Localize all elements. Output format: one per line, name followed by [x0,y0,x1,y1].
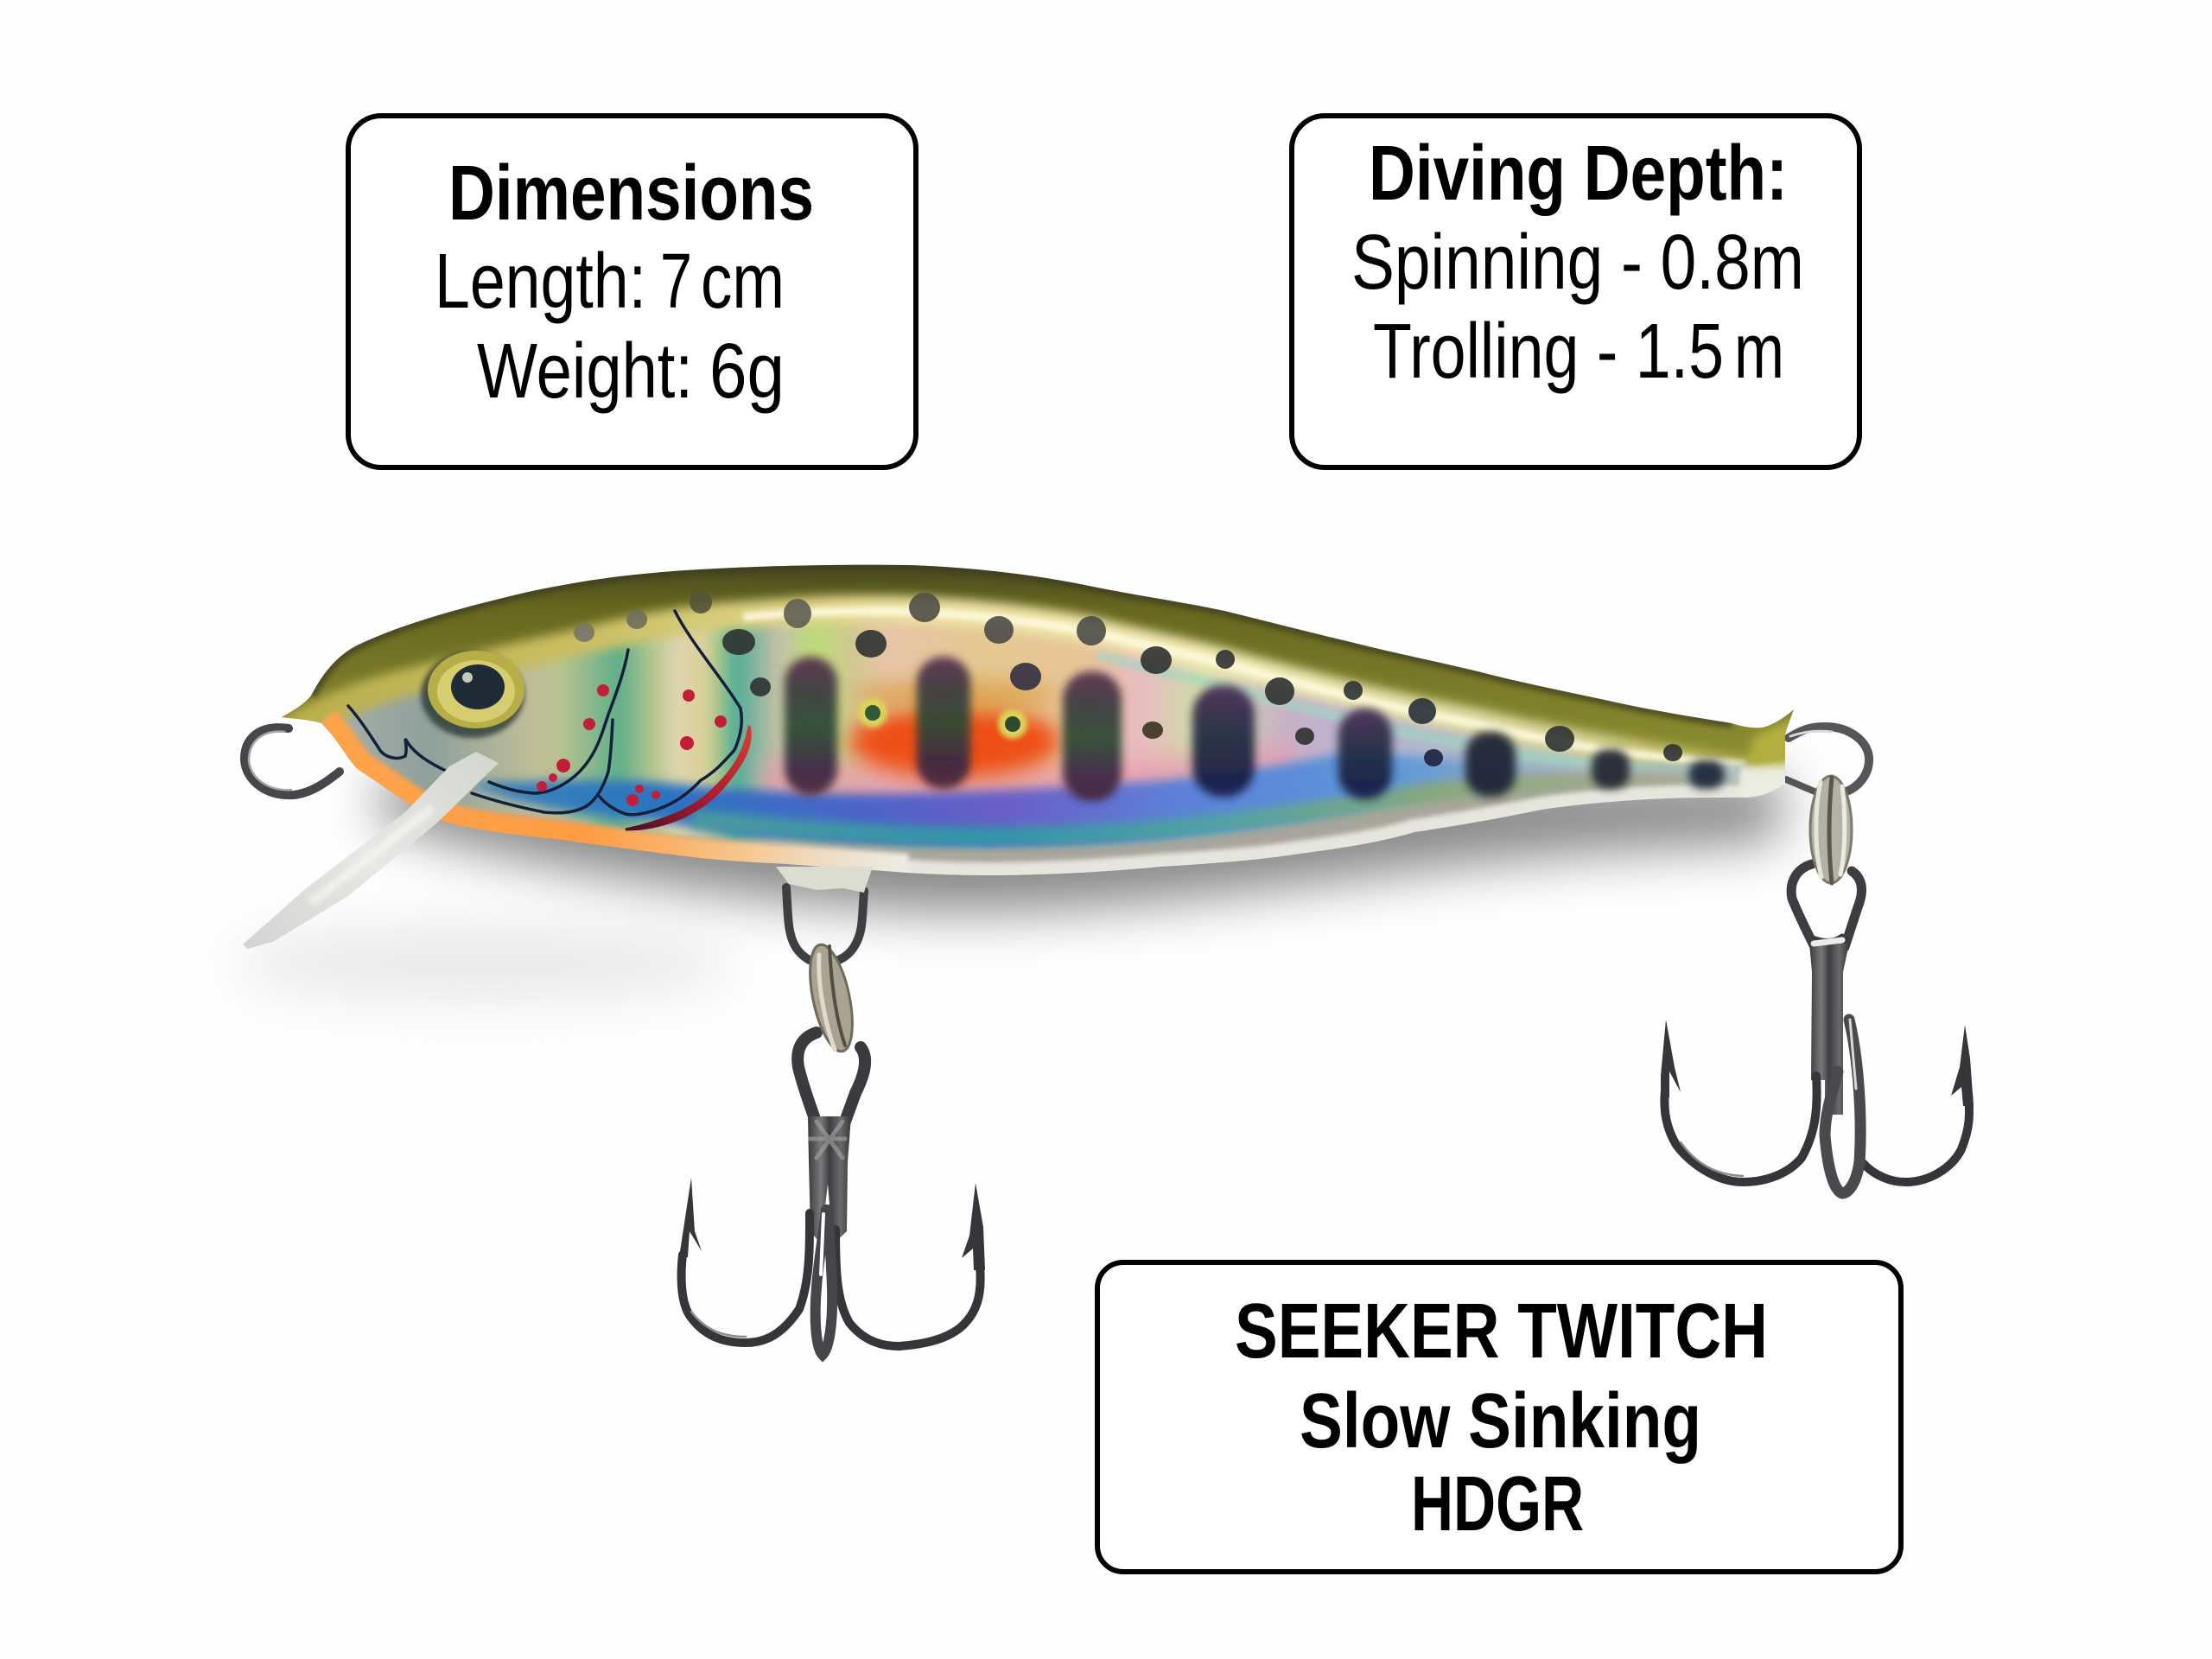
split ring [1810,776,1852,883]
yellow ringed spots [858,698,1027,739]
illustration: fishing lure [233,553,1974,1355]
panel: product name [1097,1262,1901,1572]
tail cap [1737,757,1785,798]
treble shank [1809,944,1849,1115]
treble shank [808,1116,851,1244]
silver belly [540,781,1738,875]
text: length: 7 [660,238,692,325]
left point [1664,1076,1817,1182]
red gill crescent [626,726,750,830]
orange belly [321,723,907,873]
heading: Diving Depth: Diving Depth: [1369,130,1788,217]
eye [421,651,524,738]
diving lip [243,752,499,949]
body spots [574,591,1682,766]
nose line tie ring [245,728,340,795]
red dots [537,684,727,806]
belly hanger [786,887,817,963]
panel: diving depth [1292,116,1859,467]
heading: Dimensions: Dimensions [448,150,814,237]
tail hook assembly [1664,727,1969,1193]
shadow under lure [233,778,1780,1002]
blue band [467,752,1754,849]
left point [682,1213,810,1343]
parr bars [785,657,1725,801]
front point [1825,1020,1860,1193]
pink lower flank [747,741,1300,798]
text: length: Length: [435,238,646,325]
text: weight: 6g [709,328,785,415]
back edge [311,565,1732,723]
panel: dimensions [348,116,916,467]
right point [836,1230,981,1346]
text: trolling depth: m [1734,308,1784,395]
text: length: cm [701,238,785,325]
text: spinning depth: Spinning - 0.8m [1351,219,1804,306]
gill lines [348,611,741,815]
teal band [691,782,1685,836]
heading: model name: SEEKER TWITCH [1235,1288,1768,1375]
split ring [802,941,861,1055]
lure body [282,565,1794,875]
belly hook assembly [682,887,981,1355]
pale green streak [1097,655,1745,771]
belly hook barbs [679,1178,985,1270]
text: action: Slow Sinking [1300,1378,1701,1465]
tail eye [1789,727,1869,791]
treble hook eye [1791,864,1861,947]
treble hook eye [798,1033,865,1122]
olive back [259,553,1815,830]
belly hanger mount [776,867,873,893]
text: weight: Weight: [477,328,693,415]
text: trolling depth: Trolling - 1.5 [1373,308,1724,395]
gold stripe [283,588,1785,875]
iridescent flank [320,620,1742,875]
orange patch [849,705,1060,778]
front point [816,1210,832,1355]
text: colour code: HDGR [1411,1461,1584,1548]
highlight streak [743,611,1745,766]
tail hook barbs [1661,1020,1974,1106]
right point [1862,1093,1969,1182]
white belly rim [789,784,1785,875]
